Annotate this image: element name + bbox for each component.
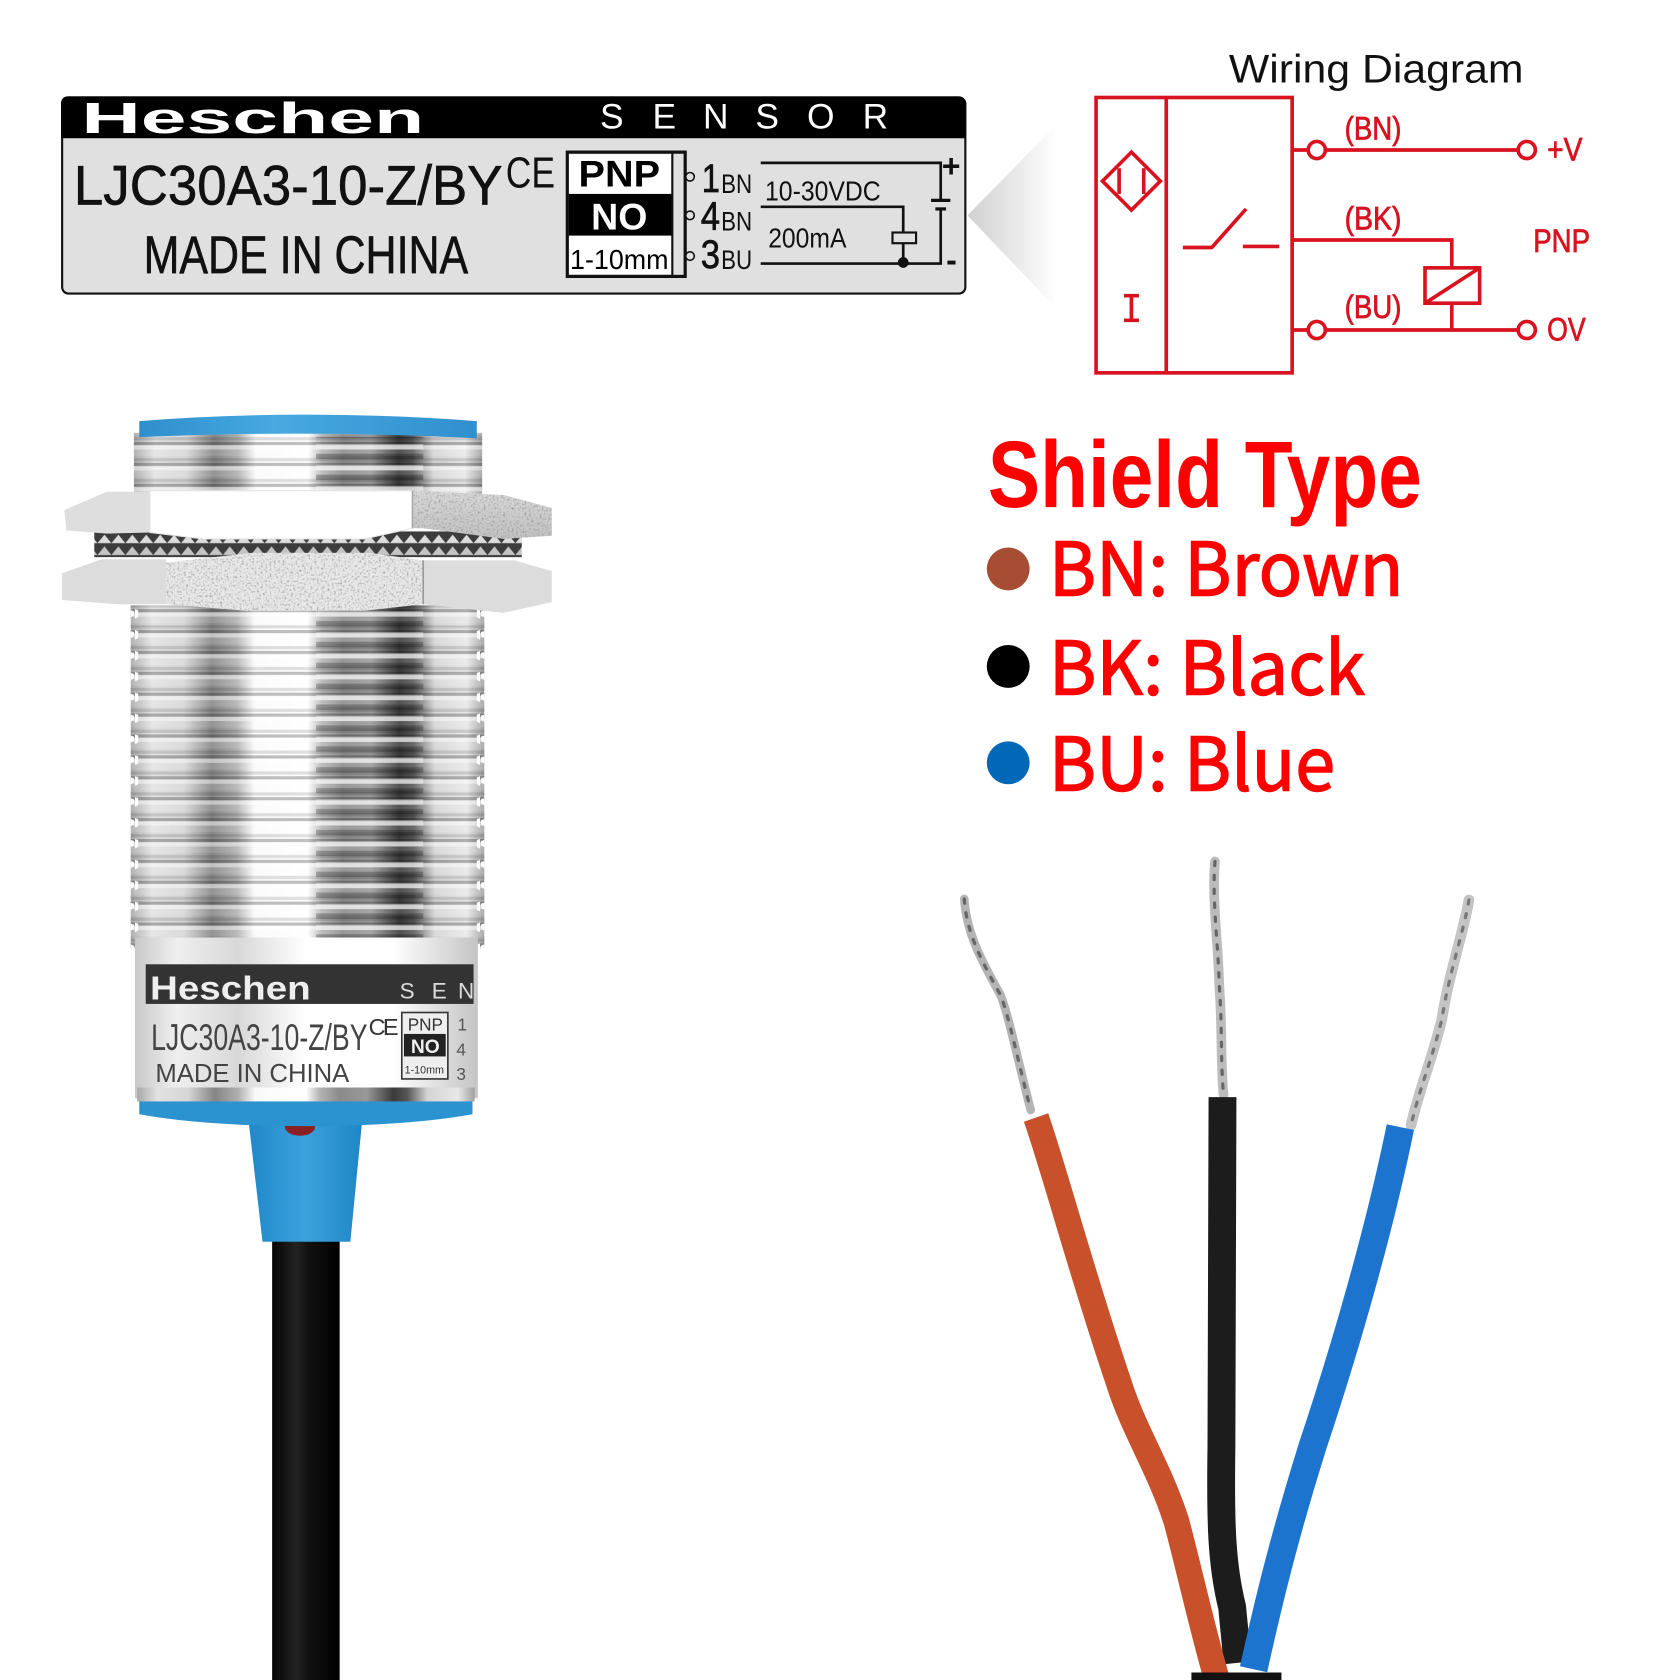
knurled lock washer xyxy=(94,531,522,557)
printed CE: CE xyxy=(369,1014,399,1040)
printed box: PNP xyxy=(408,1015,443,1035)
label word: SENSOR: SENSOR xyxy=(600,98,888,137)
PNP NO range box xyxy=(567,152,685,276)
blue cable gland xyxy=(249,1121,362,1242)
printed SEN letters: SEN xyxy=(400,979,474,1004)
brown wire line to +V: +V xyxy=(1547,132,1583,168)
stripped conductor: brown xyxy=(964,899,1031,1110)
origin text: MADE IN CHINA xyxy=(144,226,468,285)
PNP NO range box: NO xyxy=(591,195,647,237)
legend item: brown: BN: Brown xyxy=(1049,511,1404,618)
CE mark: CE xyxy=(506,149,555,198)
legend item: black: BK: Black xyxy=(1049,609,1365,716)
heading: Shield Type: Shield Type xyxy=(988,422,1422,527)
pin numbers and wire codes: 3 xyxy=(701,233,720,277)
cable jacket end xyxy=(1191,1672,1281,1680)
blue top cap xyxy=(139,415,477,438)
pin numbers and wire codes: 4 xyxy=(701,194,720,238)
label: sensor specification plate xyxy=(61,94,965,294)
printed box: 1-10mm xyxy=(405,1065,444,1077)
label brand: Heschen: Heschen xyxy=(81,94,424,143)
sensor housing box xyxy=(1096,98,1292,373)
icon: normally open switch xyxy=(1183,209,1279,248)
blue rear collar xyxy=(139,1097,473,1126)
wire: black xyxy=(1221,1097,1238,1663)
lower hex nut xyxy=(62,553,552,613)
legend: wire colours xyxy=(987,511,1404,813)
icon: load relay xyxy=(1425,268,1480,330)
printed model: LJC30A3-10-Z/BY xyxy=(151,1016,368,1058)
wire: brown xyxy=(1036,1118,1217,1680)
wiring diagram title: Wiring Diagram xyxy=(1229,47,1524,91)
legend item: blue: BU: Blue xyxy=(1049,706,1335,813)
callout wedge pointing to label xyxy=(968,107,1074,327)
printed box: 3 xyxy=(456,1064,466,1084)
printed box: NO xyxy=(411,1037,440,1058)
brown wire line to +V xyxy=(1292,110,1583,168)
pin numbers and wire codes: BN xyxy=(721,206,752,236)
printed box: 4 xyxy=(456,1039,466,1059)
blue wire line to 0V: OV xyxy=(1547,312,1586,348)
stripped conductor: blue xyxy=(1411,900,1469,1125)
PNP NO range box: 1-10mm xyxy=(570,244,669,275)
model number: LJC30A3-10-Z/BY xyxy=(74,155,502,217)
brown wire line to +V: (BN) xyxy=(1345,110,1401,146)
printed box: 1 xyxy=(458,1015,467,1035)
wire: blue xyxy=(1254,1127,1400,1669)
pin numbers and wire codes: 1 xyxy=(702,157,720,201)
PNP type label: PNP xyxy=(1533,223,1590,259)
black wire line to load: (BK) xyxy=(1345,200,1401,236)
sensor body illustration xyxy=(62,415,552,1680)
PNP NO range box: PNP xyxy=(579,152,660,194)
wiring diagram xyxy=(1096,98,1590,373)
label mini circuit: + xyxy=(942,148,961,184)
printed box xyxy=(402,1012,467,1084)
indicator LED xyxy=(285,1119,315,1136)
blue wire line to 0V xyxy=(1292,289,1586,348)
pin numbers and wire codes: BN xyxy=(721,169,752,199)
pin numbers and wire codes: BU xyxy=(721,245,752,275)
label mini circuit xyxy=(761,148,961,278)
pin numbers and wire codes xyxy=(686,157,752,277)
stripped conductor: black xyxy=(1214,861,1224,1095)
icon: inductive sensing symbol xyxy=(1102,152,1160,210)
blue wire line to 0V: (BU) xyxy=(1345,289,1401,325)
icon: current symbol I xyxy=(1124,296,1139,320)
black wire line to load xyxy=(1292,200,1452,268)
upper hex nut xyxy=(64,491,552,539)
black cable xyxy=(272,1238,340,1680)
label mini circuit: 200mA xyxy=(768,222,847,253)
label mini circuit: - xyxy=(946,242,957,278)
upper thread xyxy=(134,433,482,497)
threaded body xyxy=(131,605,484,948)
metal band at label bottom xyxy=(137,1088,475,1101)
label mini circuit: 10-30VDC xyxy=(765,175,881,206)
smooth collar below thread xyxy=(135,938,478,1098)
printed brand: Heschen xyxy=(150,971,311,1008)
printed label on sensor xyxy=(146,964,474,1088)
printed origin: MADE IN CHINA xyxy=(155,1060,350,1088)
